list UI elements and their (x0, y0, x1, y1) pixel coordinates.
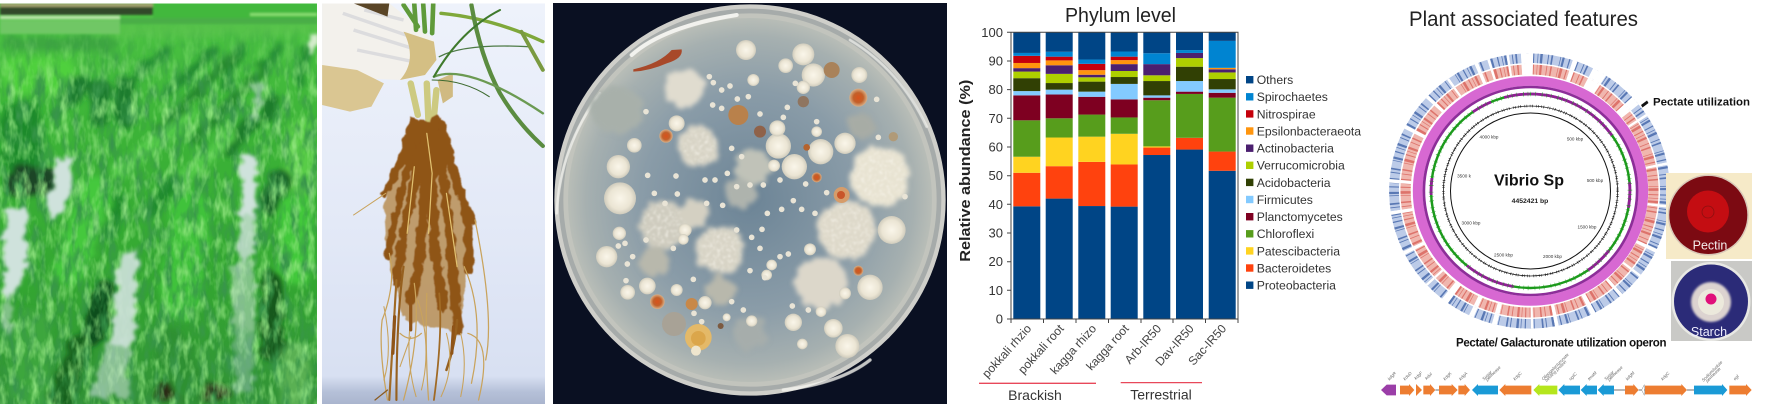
gene labels (1387, 352, 1741, 384)
marker (1641, 100, 1648, 108)
y axis tick labels: 40 (989, 197, 1003, 212)
connecting lines (1435, 389, 1694, 391)
y axis tick labels: 60 (989, 140, 1003, 154)
y axis tick labels: 0 (996, 312, 1003, 326)
scale labels: 2000 kbp (1543, 254, 1562, 259)
x axis sample labels: pokkali rhzio (979, 321, 1034, 381)
gene labels: tmaM (1587, 370, 1598, 381)
bar: Arb-IR50 (1143, 32, 1170, 319)
scale labels: 1500 kbp (1578, 224, 1597, 230)
x axis sample labels: kagga rhizo (1047, 321, 1099, 377)
y axis title: Relative abundance (%) (957, 80, 974, 262)
legend: Patescibacteria (1257, 244, 1340, 258)
gene labels: kdgK (1442, 370, 1453, 381)
gene labels: kdgC (1512, 370, 1523, 381)
scale labels: 500 kbp (1567, 136, 1584, 142)
GC content ring (1443, 106, 1618, 276)
genome name: Vibrio Sp (1494, 172, 1564, 190)
x axis sample labels: pokkali root (1015, 321, 1067, 377)
stacked bar chart: phylum level (957, 4, 1361, 403)
circular genome map (1391, 55, 1668, 327)
annotation: pectate utilization: Pectate utilization (1653, 96, 1750, 108)
gene labels: permease (1484, 364, 1502, 383)
gene labels: Sodium/solute (1701, 359, 1724, 383)
gene labels: kdgF (1413, 370, 1424, 381)
scale labels: 3000 kbp (1462, 220, 1481, 226)
opaque colonies (596, 40, 906, 358)
legend: Actinobacteria (1257, 142, 1334, 156)
legend: Acidobacteria (1257, 176, 1331, 190)
magenta and purple rings (1418, 81, 1643, 301)
y axis tick labels: 100 (981, 25, 1003, 40)
gene labels: ogl (1732, 373, 1741, 381)
plate label: Starch (1691, 325, 1727, 339)
genome size: 4452421 bp (1512, 198, 1548, 205)
legend (1246, 73, 1361, 293)
gene labels: permease (1606, 364, 1624, 383)
thin roots (354, 133, 489, 400)
chart title: Phylum level (1065, 4, 1176, 27)
x axis sample labels: Arb-IR50 (1122, 321, 1164, 367)
legend: Chloroflexi (1257, 227, 1314, 241)
legend: Epsilonbacteraeota (1257, 124, 1361, 138)
bar: Sac-IR50 (1209, 32, 1236, 319)
root mass (384, 117, 471, 333)
horizon strip (0, 3, 317, 34)
y axis tick labels: 20 (989, 254, 1003, 269)
diffuse colonies (590, 68, 910, 350)
photo: plant roots held by gloved hand (322, 3, 545, 404)
gene labels: kdgC (1660, 370, 1671, 381)
group label: Terrestrial: Terrestrial (1130, 386, 1192, 402)
operon gene map (1381, 352, 1752, 396)
group brackets (979, 382, 1202, 384)
group label: Brackish: Brackish (1008, 387, 1062, 403)
legend: Bacteroidetes (1257, 261, 1331, 275)
photo: starch plate (1671, 261, 1752, 341)
gene arrows (1381, 384, 1752, 396)
x axis sample labels: Dav-IR50 (1152, 321, 1197, 369)
y axis tick labels: 30 (989, 226, 1003, 240)
photo: rice field with water channels (0, 3, 317, 404)
gene labels: kdgA (1458, 371, 1468, 381)
x axis sample labels: Sac-IR50 (1185, 321, 1229, 368)
legend: Nitrospirae (1257, 107, 1316, 121)
leaves (404, 4, 543, 146)
gene labels: Oligogalacturonate (1541, 352, 1570, 381)
gene labels: ogtC (1568, 371, 1578, 381)
legend: Others (1257, 73, 1293, 87)
gene labels: Sugar (1481, 369, 1493, 381)
legend: Firmicutes (1257, 193, 1313, 207)
scale labels (1457, 134, 1604, 259)
gene labels: permease (1704, 366, 1722, 384)
heading: operon: Pectate/ Galacturonate utilization operon (1456, 338, 1666, 350)
y axis tick labels: 50 (989, 168, 1003, 183)
red ring (1402, 66, 1657, 316)
small scattered colonies (618, 77, 905, 322)
gene labels: kdgR (1387, 371, 1397, 381)
gene labels: binding protein (1544, 359, 1568, 383)
gene labels: kduI (1424, 371, 1434, 381)
legend: Verrucomicrobia (1257, 159, 1345, 173)
bar: Dav-IR50 (1176, 32, 1203, 319)
photo: petri dish with bacterial colonies (553, 3, 947, 404)
diffuse colony texture (644, 132, 900, 270)
y axis tick labels: 90 (989, 54, 1003, 68)
pigmented colonies (633, 49, 898, 356)
water channels (4, 36, 317, 398)
legend: Proteobacteria (1257, 279, 1336, 293)
photo: pectin plate (1666, 173, 1752, 259)
y axis tick labels: 80 (989, 82, 1003, 97)
bar: pokkali rhzio (1013, 32, 1040, 319)
y axis tick labels: 70 (989, 111, 1003, 126)
inner scale circle (1450, 113, 1610, 269)
scale labels: 500 kbp (1587, 178, 1604, 183)
scale labels: 3500 k (1457, 174, 1472, 178)
legend: Spirochaetes (1257, 90, 1328, 104)
heading: plant associated features: Plant associated features (1409, 7, 1638, 31)
y axis tick labels (981, 25, 1003, 326)
dish (554, 4, 946, 396)
gene labels: kduD (1402, 371, 1413, 381)
reflections (557, 15, 927, 390)
bar: kagga root (1111, 32, 1138, 319)
glove and fingers (322, 3, 453, 112)
axes and ticks (1007, 32, 1238, 323)
bar: kagga rhizo (1078, 32, 1105, 319)
x axis sample labels (979, 321, 1229, 381)
plate label: Pectin (1693, 238, 1727, 252)
gene labels: Sugar (1603, 369, 1615, 381)
GC skew ring (1431, 94, 1630, 288)
y axis tick labels: 10 (989, 283, 1003, 298)
gene labels: kdgM (1625, 370, 1636, 381)
outer blue ring (1391, 55, 1668, 327)
x axis sample labels: kagga root (1083, 321, 1132, 373)
scale labels: 4000 kbp (1480, 134, 1499, 140)
grass texture (0, 20, 317, 404)
bar: pokkali root (1046, 32, 1073, 319)
scale labels: 2500 kbp (1494, 252, 1513, 258)
legend: Planctomycetes (1257, 210, 1343, 224)
